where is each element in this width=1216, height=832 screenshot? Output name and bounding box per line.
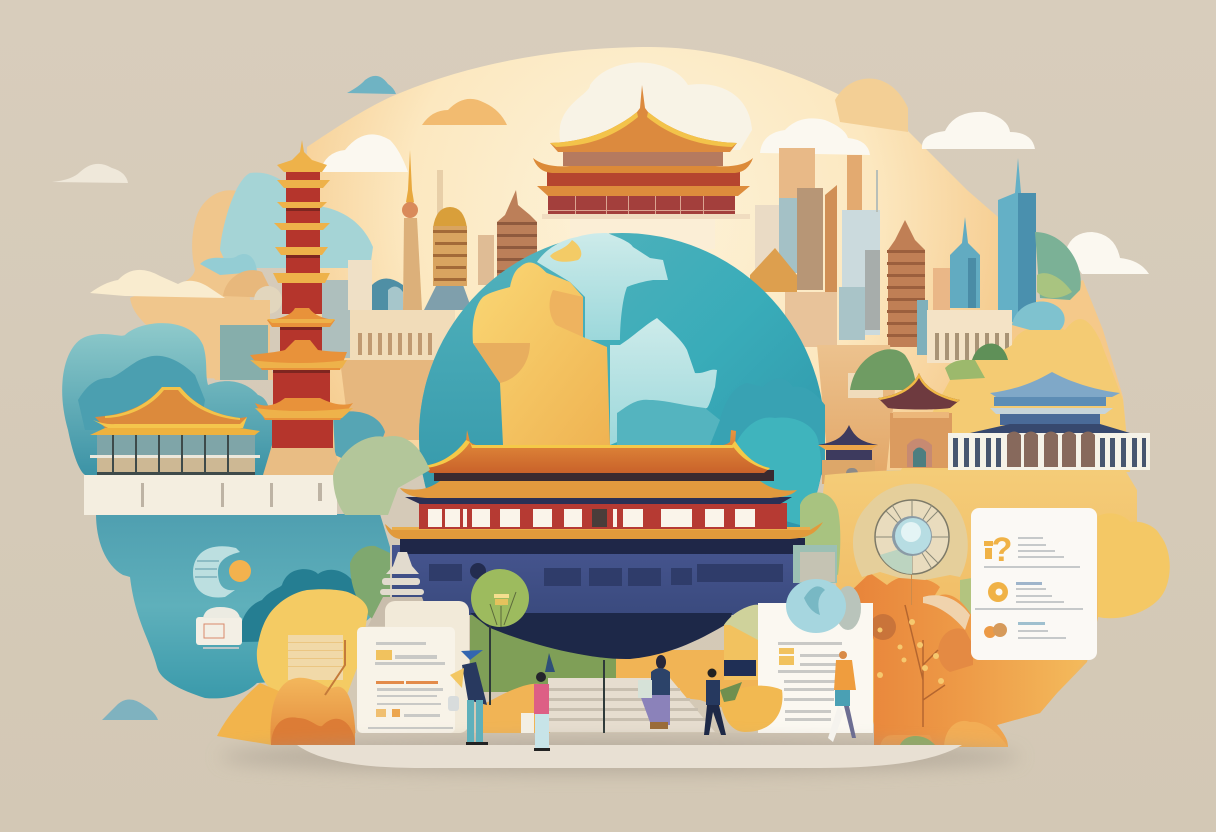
stone stupa [368,552,432,626]
green lamp tree [471,569,605,733]
left platform and lower teal blob [84,475,390,698]
upper roof [434,470,774,481]
small tech icons [193,546,251,649]
continent: gold [473,262,610,445]
left document panel [357,601,469,733]
central palace [385,430,823,659]
back dome glow [300,47,1130,470]
globe [419,233,825,639]
gold fruit shape and device [720,660,783,732]
small right pavilions [818,373,960,484]
ground platform [297,745,962,768]
card lines [975,537,1083,639]
tan base strip [355,733,874,745]
left back blobs [130,173,373,380]
palace wall [392,545,810,615]
left hills [333,436,837,623]
left gold bushes [217,589,368,745]
left pavilion [90,387,260,475]
green hill behind palace right [800,492,840,575]
lower roof [400,538,805,554]
card icons: ? [992,531,1012,569]
clouds [52,62,1149,720]
skyline right [750,148,1036,355]
lens dial [853,484,968,605]
right colonnade hall [948,372,1150,470]
skyline right ground [817,310,1012,485]
right document panel [724,603,873,733]
continent: pale blue upper [537,233,668,340]
dark canopy [470,613,732,659]
right cloud puffs [720,379,825,520]
info card [971,508,1097,660]
stairs [548,678,715,732]
red window band [419,503,787,529]
orange tree [870,595,1008,747]
person in pink [521,672,550,751]
middle roof [405,497,792,504]
top pagoda [533,85,753,249]
continent: pale blue lower [610,318,717,445]
skyline left [140,150,537,440]
left red tower [250,140,353,475]
person with blue hat [450,650,488,745]
person in orange [828,651,856,742]
ground shadow [220,741,1020,773]
right gold and orange landscape [820,470,1170,747]
person with backpack [704,668,726,735]
lower orange mass [852,573,1087,747]
person in navy with purple trousers [638,655,670,729]
right gold blobs [850,232,1130,472]
left teal cloud mass [62,323,385,475]
blue ball [786,579,861,633]
lawn and orange ground [470,612,760,733]
